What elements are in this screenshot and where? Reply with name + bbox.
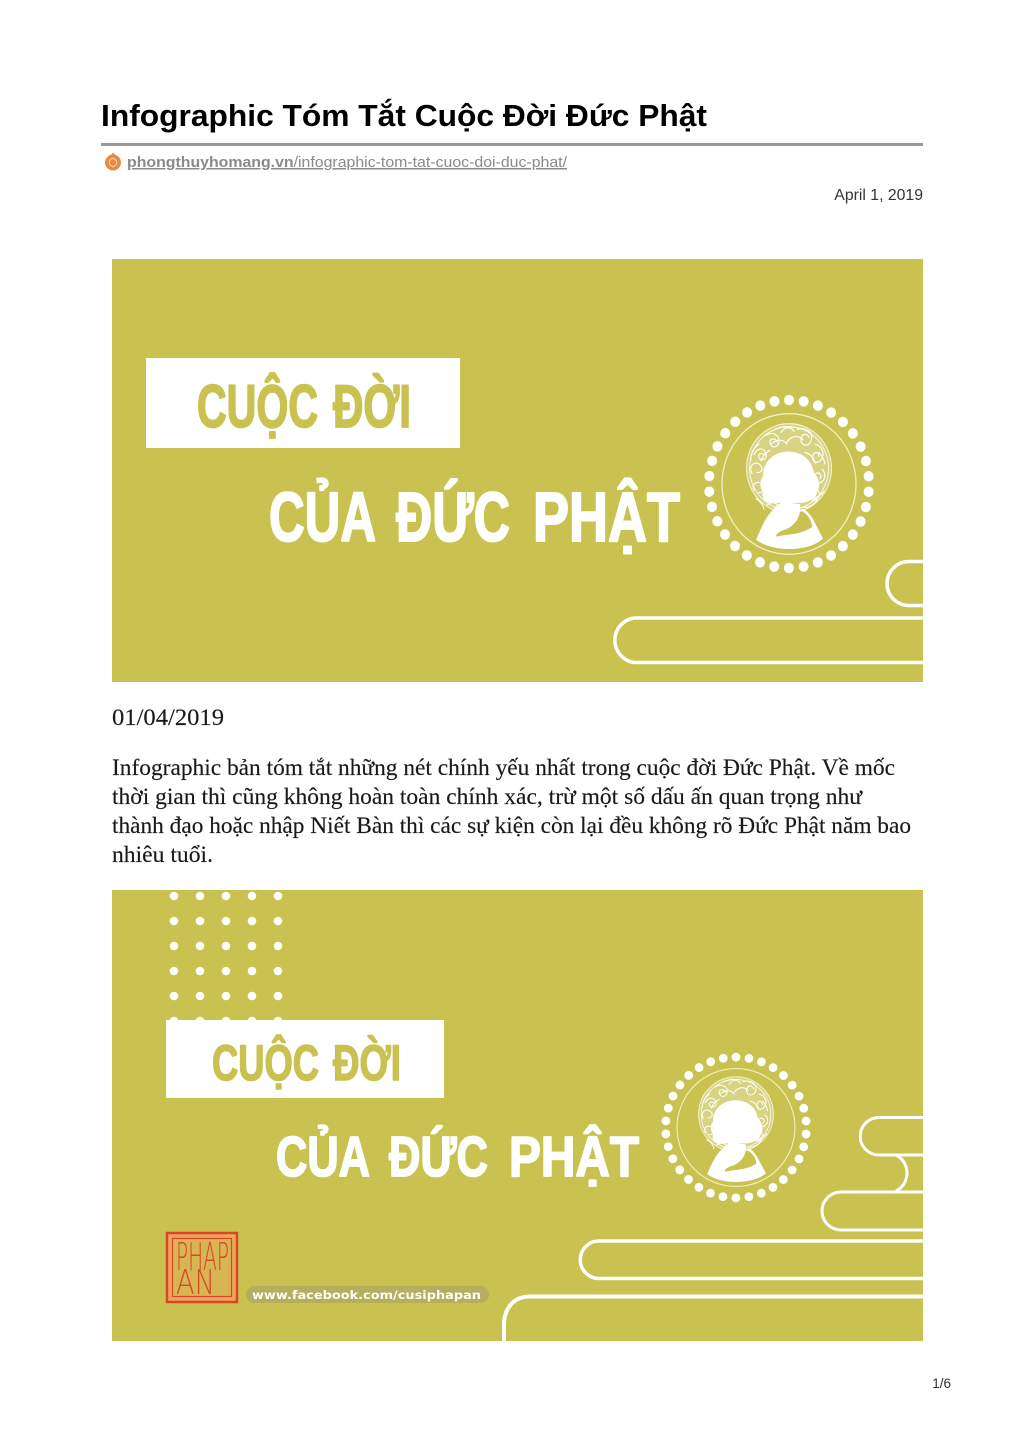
intro paragraph: thời gian thì cũng không hoàn toàn chính xác, trừ một số dấu ấn quan trọng như	[112, 784, 863, 810]
panel: first banner	[112, 259, 923, 682]
intro paragraph: thành đạo hoặc nhập Niết Bàn thì các sự kiện còn lại đều không rõ Đức Phật năm bao	[112, 813, 911, 839]
intro paragraph: Infographic bản tóm tắt những nét chính yếu nhất trong cuộc đời Đức Phật. Về mốc	[112, 755, 895, 781]
intro paragraph	[112, 755, 911, 868]
heading: của đức phật	[269, 477, 680, 556]
heading: của đức phật: CỦA	[276, 1124, 370, 1189]
icon: buddha medallion	[709, 400, 869, 568]
heading box: cuộc đời: CUỘC	[212, 1034, 319, 1091]
heading box: cuộc đời	[166, 1020, 444, 1098]
heading box: cuộc đời: CUỘC	[197, 373, 318, 440]
heading box: cuộc đời: ĐỜI	[333, 373, 411, 440]
publish date: April 1, 2019	[834, 187, 923, 204]
logo: phap an seal: AN	[176, 1263, 215, 1303]
dot grid	[170, 892, 282, 1025]
heading: của đức phật	[276, 1124, 639, 1189]
heading: của đức phật: PHẬT	[509, 1124, 639, 1189]
heading: của đức phật: CỦA	[269, 477, 376, 556]
source link: phongthuyhomang.vn /infographic-tom-tat-cuoc-doi-duc-phat/	[127, 154, 568, 171]
heading: của đức phật: PHẬT	[533, 477, 680, 556]
heading: của đức phật: ĐỨC	[389, 1125, 488, 1189]
logo: phap an seal: PHAP	[176, 1235, 229, 1279]
icon: site favicon	[105, 152, 121, 170]
page title: Infographic Tóm Tắt Cuộc Đời Đức Phật	[101, 97, 707, 133]
facebook url pill	[246, 1286, 489, 1303]
facebook url pill: www.facebook.com/cusiphapan	[252, 1288, 481, 1302]
decorative cloud lines	[615, 562, 923, 662]
intro paragraph: nhiêu tuổi.	[112, 842, 213, 868]
date line: 01/04/2019	[112, 705, 224, 731]
heading box: cuộc đời: ĐỜI	[333, 1035, 401, 1091]
heading box: cuộc đời	[146, 358, 460, 448]
icon: buddha medallion	[666, 1057, 806, 1198]
page number: 1/6	[932, 1376, 951, 1391]
logo: phap an seal	[167, 1233, 237, 1303]
heading: của đức phật: ĐỨC	[396, 478, 510, 556]
panel: second banner	[112, 890, 923, 1342]
decorative cloud lines	[504, 1118, 923, 1342]
